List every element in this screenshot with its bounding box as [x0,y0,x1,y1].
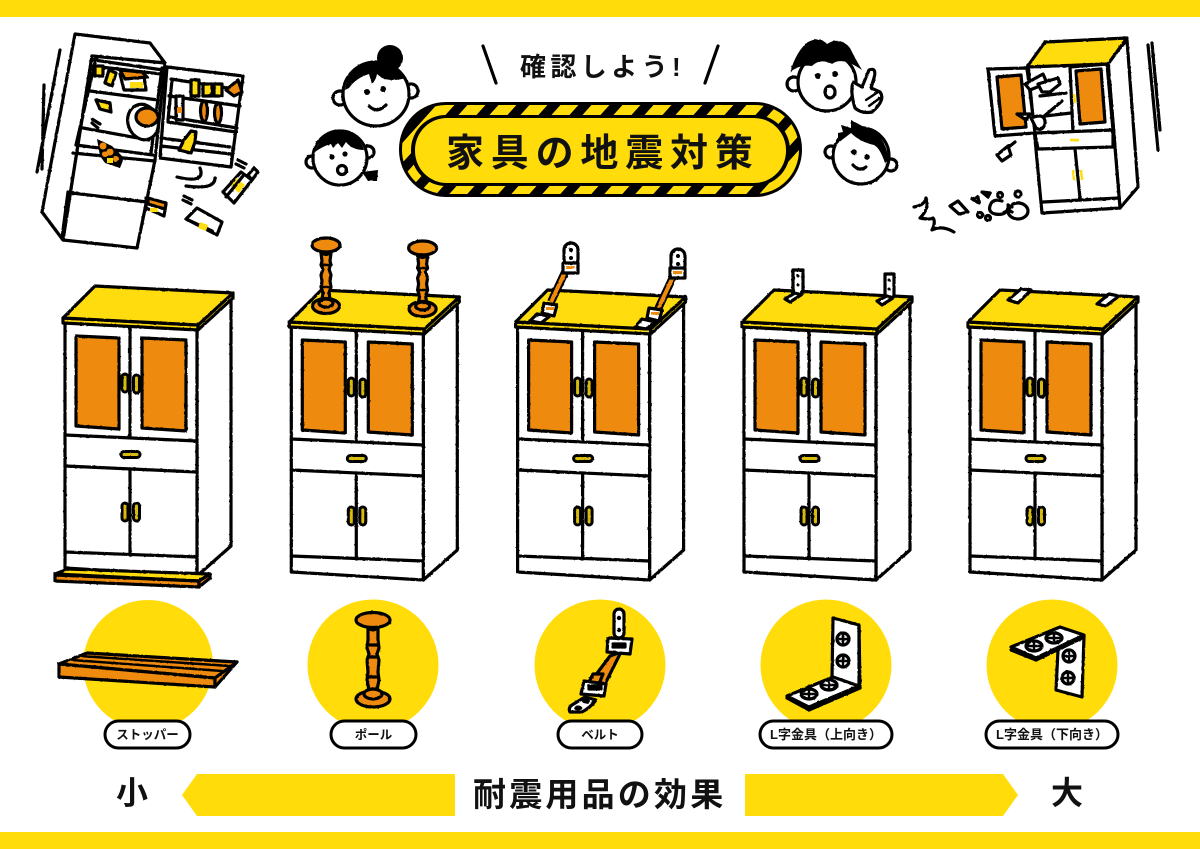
slash right [705,46,718,83]
fridge contents [92,66,242,216]
falling dishes [997,74,1062,161]
pill: ベルト: ベルト [581,728,619,742]
pill: ベルト [558,721,642,748]
face: girl [306,131,378,185]
motion lines right [1148,43,1160,150]
bracket left [1008,289,1031,303]
pole right [409,241,437,316]
icon: L bracket down [1011,627,1084,697]
heading: 確認しよう [483,46,718,83]
face: boy [825,120,897,184]
cabinet with stopper [55,286,233,587]
bracket right [877,274,894,305]
pill: ストッパー [105,721,190,748]
top yellow band [0,0,1200,17]
belt left [530,243,578,323]
fridge door open [160,67,243,167]
label: small: 小 [116,775,148,811]
bottom yellow band [0,832,1200,849]
arrow left [182,774,455,816]
title banner with caution stripes [399,102,802,197]
icon: pole [356,612,390,707]
cabinet with belts [516,243,686,580]
illustration: tipped open refrigerator [37,34,258,248]
pill: ポール [331,721,416,748]
broken dishes debris [914,191,1028,232]
cabinet with L brackets pointing up [742,270,912,580]
effect scale [116,774,1083,816]
stopper under cabinet [55,569,210,587]
icon: belt [569,609,632,712]
pole left [312,238,340,314]
cabinet [63,286,233,576]
open cabinet door [988,68,1035,136]
circle: stopper [83,600,213,730]
belt right [635,249,685,329]
cabinet with L brackets pointing down [968,289,1138,580]
pill: ストッパー: ストッパー [116,728,179,742]
pill: L字金具(上向き): L字金具（上向き） [770,727,882,742]
circle: belt [534,600,666,730]
circle: L bracket down [986,600,1118,730]
cabinet with poles [289,238,459,580]
pill: L字金具(下向き): L字金具（下向き） [996,727,1108,742]
icon: stopper [59,653,237,687]
circle: L bracket up [760,600,892,730]
subtitle text: 確認しよう! [520,52,685,82]
arrow right [745,774,1018,816]
icon: L bracket up [787,618,860,710]
illustration: tipped dish cabinet [914,38,1160,232]
cabinet [289,290,459,580]
motion lines left [37,50,60,172]
bracket left [785,270,803,302]
yellow circles [83,600,1118,730]
faces [306,39,897,185]
icon: thumbs up [852,69,882,112]
fridge body [42,34,165,248]
label: large: 大 [1051,775,1083,811]
scale title: 耐震用品の効果 [473,776,726,813]
title text: 家具の地震対策 [446,133,760,175]
fallen bottle and box [177,160,258,235]
pill: L字金具(上向き) [760,721,892,748]
bracket right [1097,294,1119,306]
pill: L字金具(下向き) [986,721,1118,748]
dish cabinet body [1027,38,1138,213]
cabinet [516,290,686,580]
pill: ポール: ポール [355,727,393,742]
cabinet [742,290,912,580]
circle: pole [308,600,438,730]
face: father with thumbs up [787,39,882,112]
cabinet [968,290,1138,580]
label pills [105,721,1118,748]
face: mother [333,45,418,126]
slash left [483,46,496,83]
